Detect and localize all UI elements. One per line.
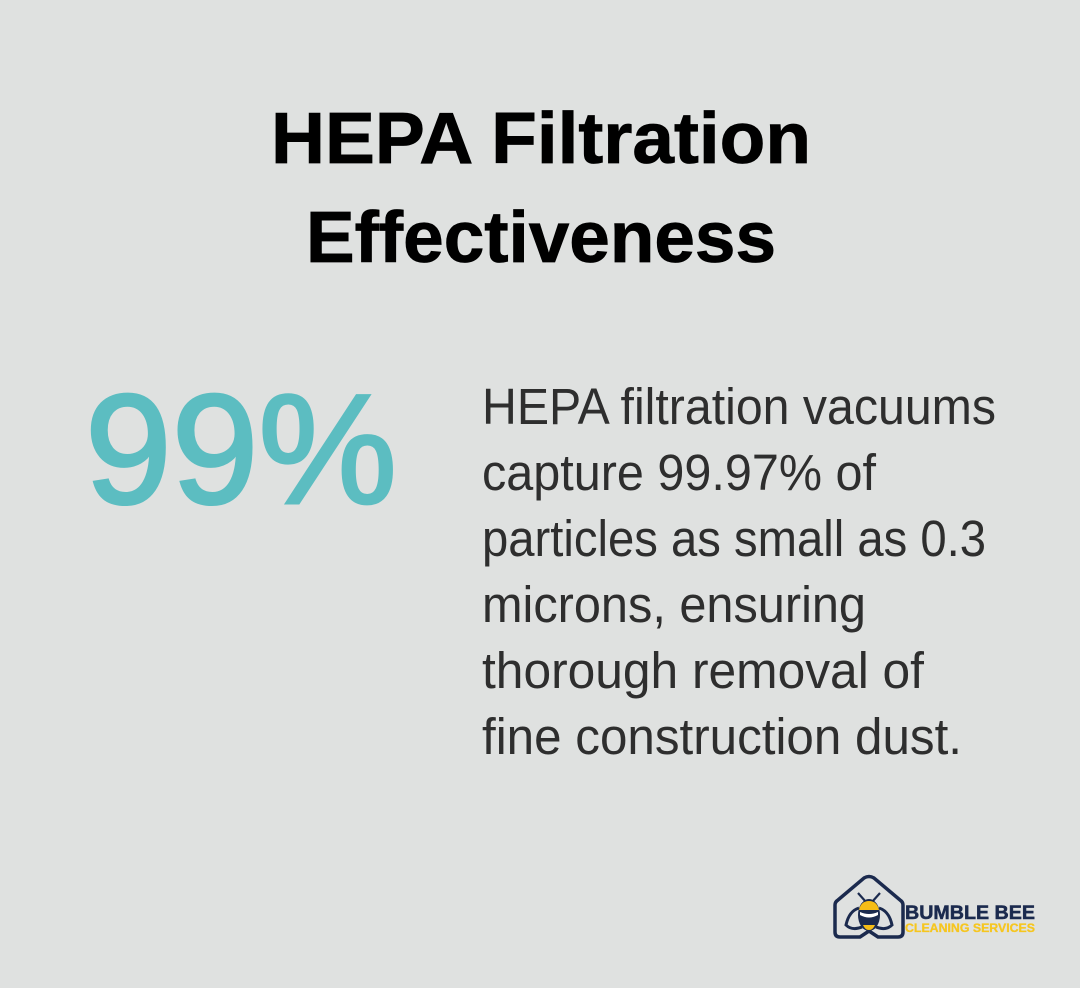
icon: house outline (835, 876, 903, 937)
big statistic: 99%: 99% (85, 363, 397, 537)
logo wordmark: BUMBLE BEE (905, 903, 1035, 924)
title (271, 99, 811, 278)
description text: fine construction dust. (482, 708, 962, 765)
description text: HEPA filtration vacuums (482, 378, 996, 435)
description text: microns, ensuring (482, 576, 866, 633)
title: HEPA Filtration (271, 99, 811, 179)
logo tagline: CLEANING SERVICES (905, 921, 1035, 935)
description text: thorough removal of (482, 642, 925, 699)
description text (482, 378, 996, 765)
icon: bee (846, 893, 892, 931)
logo: Bumble Bee Cleaning Services (835, 876, 1035, 937)
description text: capture 99.97% of (482, 444, 877, 501)
title: Effectiveness (306, 198, 776, 278)
description text: particles as small as 0.3 (482, 510, 986, 567)
